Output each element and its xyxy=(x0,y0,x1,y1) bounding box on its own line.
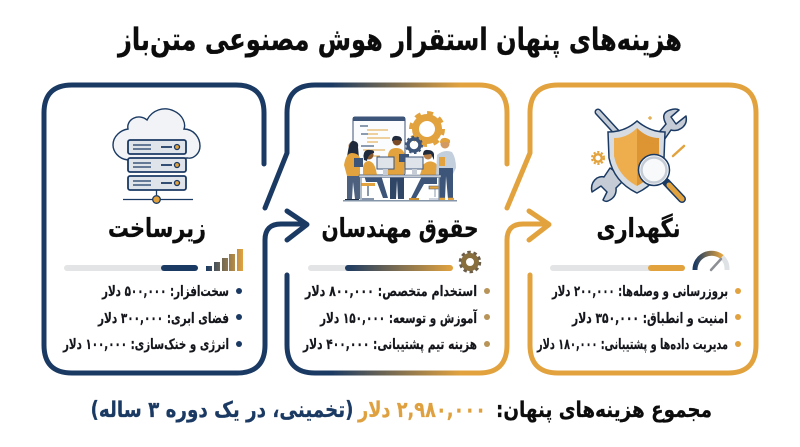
list: infrastructure costs: سخت‌افزار: ۵۰۰,۰۰۰ دلار xyxy=(101,284,229,300)
list: maintenance costs: مدیریت داده‌ها و پشتیبانی: ۱۸۰,۰۰۰ دلار xyxy=(536,337,728,353)
list: salary costs: استخدام متخصص: ۸۰۰,۰۰۰ دلار xyxy=(304,284,477,300)
list: maintenance costs: بروزرسانی و وصله‌ها: ۲۰۰,۰۰۰ دلار xyxy=(551,284,728,300)
panel: maintenance xyxy=(507,85,756,373)
icon: cloud server xyxy=(113,109,200,203)
footer amount: ۲,۹۸۰,۰۰۰ دلار xyxy=(357,398,486,423)
arrowhead xyxy=(529,211,549,240)
desk and monitors xyxy=(343,157,457,202)
magnifier xyxy=(638,154,682,199)
icon: gauge xyxy=(695,253,727,270)
footer label: مجموع هزینه‌های پنهان: xyxy=(496,398,712,423)
person 4 xyxy=(409,150,441,199)
progress bar xyxy=(550,265,685,271)
panel outline with arrow xyxy=(265,85,547,373)
small gear and spanner xyxy=(592,116,684,164)
footer: total hidden costs xyxy=(91,398,712,423)
progress bar xyxy=(308,265,453,271)
list: maintenance costs xyxy=(536,284,741,353)
person 1 xyxy=(344,141,363,201)
icon: engineering team xyxy=(343,113,457,202)
person 3 xyxy=(388,136,409,199)
list: infrastructure costs: فضای ابری: ۳۰۰,۰۰۰ دلار xyxy=(97,311,229,327)
panel outline xyxy=(507,85,756,373)
person 5 xyxy=(436,138,456,199)
panel: infrastructure xyxy=(44,85,307,373)
icon: signal bars xyxy=(206,249,243,271)
progress bar xyxy=(64,265,198,271)
icon: shield and tools xyxy=(592,109,686,201)
list: salary costs xyxy=(302,284,490,353)
heading: maintenance: نگهداری xyxy=(596,213,680,244)
wrenches xyxy=(592,109,686,201)
footer note: (تخمینی، در یک دوره ۳ ساله) xyxy=(91,398,354,423)
heading: infrastructure: زیرساخت xyxy=(108,214,206,244)
person 2 xyxy=(361,150,388,199)
list: infrastructure costs: انرژی و خنک‌سازی: ۱۰۰,۰۰۰ دلار xyxy=(62,337,229,353)
heading: engineer salaries: حقوق مهندسان xyxy=(322,214,478,244)
screwdriver xyxy=(598,112,620,136)
shield xyxy=(608,121,665,193)
list: maintenance costs: امنیت و انطباق: ۳۵۰,۰۰۰ دلار xyxy=(571,311,728,327)
panel outline with arrow xyxy=(44,85,307,373)
list: infrastructure costs xyxy=(62,284,242,353)
icon: gear xyxy=(460,252,480,272)
panel: engineer salaries xyxy=(265,85,549,373)
list: salary costs: هزینه تیم پشتیبانی: ۴۰۰,۰۰۰ دلار xyxy=(302,337,477,353)
list: salary costs: آموزش و توسعه: ۱۵۰,۰۰۰ دلار xyxy=(319,309,478,327)
